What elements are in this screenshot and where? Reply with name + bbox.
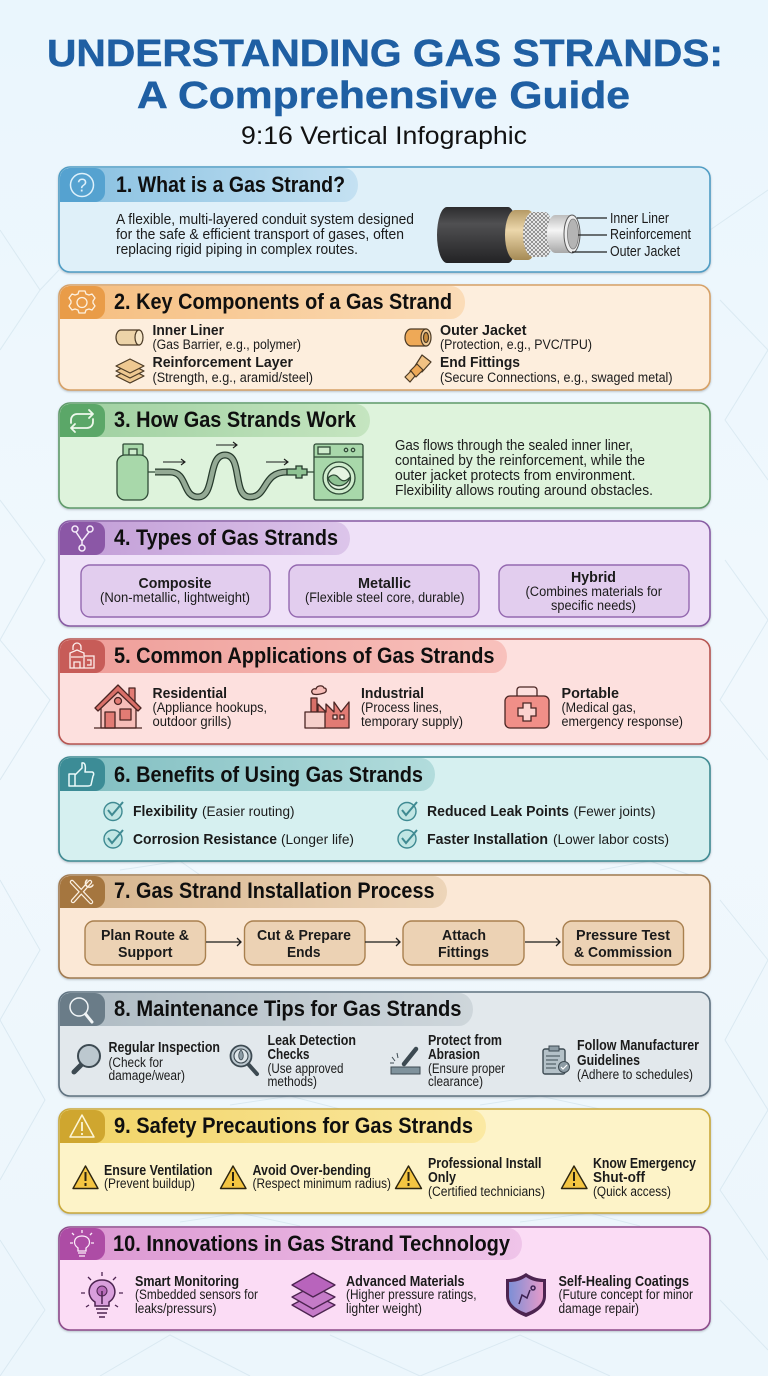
item: advanced materials: (Higher pressure ratings, bbox=[346, 1287, 476, 1302]
item: leak detection: Leak Detection bbox=[268, 1032, 356, 1049]
description 1: replacing rigid piping in complex routes. bbox=[116, 242, 358, 258]
benefit: faster installation: (Lower labor costs) bbox=[553, 832, 669, 847]
item: outer jacket bbox=[440, 322, 592, 352]
item: protect from abrasion: Abrasion bbox=[428, 1046, 480, 1063]
item: industrial bbox=[361, 685, 463, 729]
cable labels: Outer Jacket bbox=[610, 244, 680, 260]
icon: material layers bbox=[292, 1273, 335, 1317]
item: ensure ventilation bbox=[104, 1162, 212, 1191]
icon: thumbs up bbox=[60, 758, 105, 791]
icon: inspection magnifier bbox=[74, 1045, 100, 1072]
item: smart monitoring: leaks/pressurs) bbox=[135, 1301, 216, 1316]
heading 4: 4. Types of Gas Strands bbox=[114, 525, 338, 550]
step 3 bbox=[403, 921, 524, 965]
item: avoid over-bending: Avoid Over-bending bbox=[252, 1162, 371, 1179]
item: ensure ventilation: (Prevent buildup) bbox=[104, 1176, 195, 1191]
panel 1: what is a gas strand bbox=[59, 167, 710, 272]
item: residential: (Appliance hookups, bbox=[152, 700, 267, 715]
icon: light bulb header bbox=[60, 1228, 105, 1260]
heading 7: 7. Gas Strand Installation Process bbox=[114, 878, 434, 903]
item: avoid over-bending bbox=[252, 1162, 391, 1191]
icon: warning 2 bbox=[220, 1166, 246, 1188]
gas tank bbox=[117, 444, 148, 500]
title: UNDERSTANDING GAS STRANDS: bbox=[47, 33, 723, 75]
flow arrows bbox=[163, 442, 288, 465]
item: protect from abrasion: Protect from bbox=[428, 1032, 502, 1049]
item: smart monitoring bbox=[135, 1273, 258, 1316]
item: reinforcement layer bbox=[152, 354, 313, 385]
step 3: Fittings bbox=[438, 944, 489, 961]
icon: warning 1 bbox=[73, 1166, 98, 1188]
item: outer jacket: Outer Jacket bbox=[440, 322, 526, 339]
icon: cycle arrows bbox=[60, 404, 105, 437]
card: hybrid: Hybrid bbox=[571, 569, 616, 586]
header tab 1 bbox=[60, 168, 358, 202]
item: outer jacket: (Protection, e.g., PVC/TPU) bbox=[440, 337, 592, 352]
cable cross-section bbox=[437, 207, 607, 263]
header tab 8 bbox=[60, 993, 473, 1026]
item: advanced materials bbox=[346, 1273, 476, 1316]
benefit: flexibility: (Easier routing) bbox=[202, 804, 294, 819]
header tab 3 bbox=[60, 404, 370, 437]
item: residential: outdoor grills) bbox=[152, 714, 232, 729]
benefit: corrosion resistance: (Longer life) bbox=[281, 832, 354, 847]
item: regular inspection bbox=[108, 1039, 220, 1083]
heading 9: 9. Safety Precautions for Gas Strands bbox=[114, 1113, 473, 1138]
benefit: reduced leak points: (Fewer joints) bbox=[574, 804, 656, 819]
description 3: contained by the reinforcement, while the bbox=[395, 453, 645, 469]
card: hybrid: specific needs) bbox=[551, 598, 636, 613]
item: end fittings bbox=[440, 354, 672, 385]
icon: end fitting bbox=[405, 355, 431, 382]
item: professional install: (Certified technicians) bbox=[428, 1184, 545, 1199]
step 1 bbox=[85, 921, 206, 965]
item: regular inspection: (Check for bbox=[108, 1055, 163, 1070]
item: emergency shut-off: Know Emergency bbox=[593, 1155, 697, 1172]
panel 2: key components bbox=[59, 285, 710, 390]
icon: reinforcement layers bbox=[116, 359, 144, 383]
benefit: reduced leak points bbox=[398, 802, 656, 820]
header tab 6 bbox=[60, 758, 435, 791]
item: self-healing coatings: (Future concept for minor bbox=[558, 1287, 693, 1302]
heading 10: 10. Innovations in Gas Strand Technology bbox=[113, 1231, 511, 1256]
item: smart monitoring: (Smbedded sensors for bbox=[135, 1287, 258, 1302]
item: industrial: Industrial bbox=[361, 685, 424, 702]
icon: abrasion bbox=[390, 1049, 420, 1074]
panel 5: applications bbox=[59, 639, 710, 744]
panel 10: innovations bbox=[59, 1227, 710, 1330]
item: manufacturer guidelines: (Adhere to schedules) bbox=[577, 1067, 693, 1082]
description 3: outer jacket protects from environment. bbox=[395, 468, 636, 484]
icon: warning header bbox=[60, 1110, 105, 1143]
header tab 7 bbox=[60, 876, 447, 908]
icon: buildings bbox=[60, 640, 105, 673]
icon: gear bbox=[60, 286, 105, 319]
item: portable bbox=[562, 685, 683, 729]
item: inner liner: (Gas Barrier, e.g., polymer) bbox=[152, 337, 301, 352]
panel 4: types bbox=[59, 521, 710, 626]
item: leak detection: (Use approved bbox=[268, 1061, 344, 1076]
card: composite: (Non-metallic, lightweight) bbox=[100, 590, 250, 605]
item: advanced materials: lighter weight) bbox=[346, 1301, 422, 1316]
icon: smart bulb bbox=[81, 1272, 123, 1317]
step 1: Support bbox=[118, 944, 172, 961]
arrow 3 bbox=[525, 938, 560, 946]
heading 5: 5. Common Applications of Gas Strands bbox=[114, 643, 494, 668]
item: leak detection: methods) bbox=[268, 1074, 317, 1089]
hose connector bbox=[287, 466, 307, 478]
item: manufacturer guidelines bbox=[577, 1037, 699, 1082]
item: self-healing coatings bbox=[558, 1273, 693, 1316]
item: advanced materials: Advanced Materials bbox=[346, 1273, 464, 1290]
benefit: reduced leak points: Reduced Leak Points bbox=[427, 803, 569, 820]
item: protect from abrasion bbox=[428, 1032, 505, 1089]
icon: question mark: ? bbox=[77, 176, 87, 196]
heading 6: 6. Benefits of Using Gas Strands bbox=[114, 762, 423, 787]
item: emergency shut-off bbox=[593, 1155, 697, 1199]
header tab 10 bbox=[60, 1228, 522, 1260]
benefit: faster installation: Faster Installation bbox=[427, 831, 548, 848]
item: residential bbox=[152, 685, 267, 729]
item: inner liner bbox=[152, 322, 301, 352]
icon: tools bbox=[60, 876, 105, 908]
benefit: flexibility: Flexibility bbox=[133, 803, 198, 820]
item: end fittings: (Secure Connections, e.g., swaged metal) bbox=[440, 370, 672, 385]
panel 8: maintenance bbox=[59, 992, 710, 1096]
heading 1: 1. What is a Gas Strand? bbox=[116, 172, 345, 197]
icon: warning 3 bbox=[396, 1166, 422, 1188]
item: portable: (Medical gas, bbox=[562, 700, 636, 715]
heading 3: 3. How Gas Strands Work bbox=[114, 407, 357, 432]
cable labels: Inner Liner bbox=[610, 211, 669, 227]
item: industrial: (Process lines, bbox=[361, 700, 442, 715]
header tab 9 bbox=[60, 1110, 486, 1143]
benefit: corrosion resistance bbox=[104, 830, 354, 848]
item: industrial: temporary supply) bbox=[361, 714, 463, 729]
item: professional install bbox=[428, 1155, 545, 1199]
icon: branching nodes bbox=[60, 522, 105, 555]
card: composite: Composite bbox=[138, 575, 212, 592]
item: avoid over-bending: (Respect minimum radius) bbox=[252, 1176, 391, 1191]
item: professional install: Only bbox=[428, 1169, 457, 1186]
subtitle: 9:16 Vertical Infographic bbox=[241, 122, 527, 150]
description 1: for the safe & efficient transport of gases, often bbox=[116, 227, 404, 243]
step 3: Attach bbox=[442, 927, 486, 944]
panel 9: safety bbox=[59, 1109, 710, 1213]
icon: first aid kit bbox=[505, 687, 549, 728]
card: hybrid: (Combines materials for bbox=[526, 584, 662, 599]
item: regular inspection: Regular Inspection bbox=[108, 1039, 220, 1056]
item: protect from abrasion: clearance) bbox=[428, 1074, 483, 1089]
appliance bbox=[314, 444, 363, 500]
header tab 2 bbox=[60, 286, 465, 319]
item: portable: Portable bbox=[562, 685, 619, 702]
card: metallic: (Flexible steel core, durable) bbox=[305, 590, 464, 605]
header tab 5 bbox=[60, 640, 507, 673]
icon: outer jacket bbox=[405, 329, 431, 346]
panel 6: benefits bbox=[59, 757, 710, 861]
item: professional install: Professional Install bbox=[428, 1155, 542, 1172]
arrow 2 bbox=[365, 938, 400, 946]
item: end fittings: End Fittings bbox=[440, 354, 520, 371]
cable labels: Reinforcement bbox=[610, 227, 691, 243]
card: hybrid bbox=[499, 565, 689, 617]
item: inner liner: Inner Liner bbox=[152, 322, 224, 339]
icon: magnifier header bbox=[60, 993, 105, 1026]
title: A Comprehensive Guide bbox=[137, 75, 630, 117]
benefit: flexibility bbox=[104, 802, 294, 820]
description 3: Flexibility allows routing around obstacles. bbox=[395, 483, 653, 499]
item: emergency shut-off: Shut-off bbox=[593, 1169, 646, 1186]
step 4 bbox=[563, 921, 684, 965]
icon: leak detection bbox=[230, 1046, 257, 1074]
item: manufacturer guidelines: Guidelines bbox=[577, 1052, 640, 1069]
item: portable: emergency response) bbox=[562, 714, 683, 729]
step 2: Ends bbox=[287, 944, 320, 961]
panel 3: how gas strands work bbox=[59, 403, 710, 508]
item: ensure ventilation: Ensure Ventilation bbox=[104, 1162, 212, 1179]
hose bbox=[148, 455, 314, 497]
item: leak detection bbox=[268, 1032, 356, 1089]
card: composite bbox=[81, 565, 270, 617]
step 2 bbox=[244, 921, 365, 965]
benefit: corrosion resistance: Corrosion Resistance bbox=[133, 831, 277, 848]
panel 7: installation bbox=[59, 875, 710, 978]
flow diagram bbox=[117, 442, 363, 500]
icon: factory bbox=[305, 686, 349, 728]
card: metallic bbox=[289, 565, 479, 617]
item: leak detection: Checks bbox=[268, 1046, 310, 1063]
icon: warning 4 bbox=[562, 1166, 587, 1188]
item: smart monitoring: Smart Monitoring bbox=[135, 1273, 239, 1290]
card: metallic: Metallic bbox=[358, 575, 411, 592]
title bbox=[47, 33, 723, 117]
heading 2: 2. Key Components of a Gas Strand bbox=[114, 289, 452, 314]
icon: house bbox=[94, 685, 142, 728]
item: reinforcement layer: (Strength, e.g., aramid/steel) bbox=[152, 370, 313, 385]
step 1: Plan Route & bbox=[101, 927, 189, 944]
heading 8: 8. Maintenance Tips for Gas Strands bbox=[114, 996, 462, 1021]
cable labels bbox=[610, 211, 691, 260]
step 4: Pressure Test bbox=[576, 927, 670, 944]
item: manufacturer guidelines: Follow Manufacturer bbox=[577, 1037, 699, 1054]
benefit: faster installation bbox=[398, 830, 669, 848]
item: regular inspection: damage/wear) bbox=[108, 1068, 185, 1083]
description 1 bbox=[116, 212, 414, 258]
step 4: & Commission bbox=[574, 944, 672, 961]
arrow 1 bbox=[206, 938, 241, 946]
icon: shield bbox=[506, 1273, 546, 1317]
item: protect from abrasion: (Ensure proper bbox=[428, 1061, 505, 1076]
item: self-healing coatings: Self-Healing Coatings bbox=[558, 1273, 689, 1290]
icon: inner liner bbox=[116, 330, 143, 345]
item: self-healing coatings: damage repair) bbox=[558, 1301, 639, 1316]
description 3: Gas flows through the sealed inner liner, bbox=[395, 438, 633, 454]
step 2: Cut & Prepare bbox=[257, 927, 351, 944]
item: residential: Residential bbox=[152, 685, 227, 702]
item: emergency shut-off: (Quick access) bbox=[593, 1184, 671, 1199]
icon: clipboard bbox=[543, 1046, 570, 1074]
description 3 bbox=[395, 438, 653, 499]
icon: question mark bbox=[60, 168, 105, 202]
item: reinforcement layer: Reinforcement Layer bbox=[152, 354, 293, 371]
header tab 4 bbox=[60, 522, 350, 555]
description 1: A flexible, multi-layered conduit system designed bbox=[116, 212, 414, 228]
